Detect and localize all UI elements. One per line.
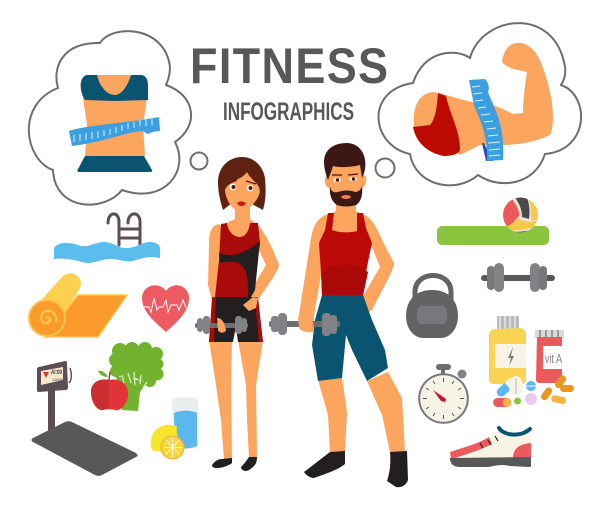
- shorts: [209, 297, 263, 342]
- icon: running shoe: [450, 428, 531, 467]
- red top: [413, 93, 460, 156]
- legs: [318, 378, 347, 452]
- icon: scale: [32, 361, 138, 476]
- thought bubble: muscular arm: [376, 23, 581, 185]
- icon: glass of water: [172, 397, 198, 450]
- shoes: [304, 451, 345, 478]
- icon: dumbbell: [481, 263, 555, 292]
- hair: [324, 143, 365, 180]
- measuring tape: [69, 117, 160, 146]
- icon: pills: [493, 374, 574, 407]
- neck and chest skin: [222, 205, 258, 242]
- slim torso: [83, 75, 147, 156]
- shoes: [212, 457, 257, 471]
- shorts: [312, 295, 388, 381]
- right arm: [243, 223, 279, 310]
- neck and chest skin: [326, 198, 366, 240]
- scale display: AI:00: [51, 370, 62, 376]
- icon: red vitamin bottle: [535, 330, 564, 383]
- icon: red vitamin bottle: vit A: [545, 351, 562, 366]
- scale display: [41, 367, 63, 385]
- eyes and lips: [228, 180, 256, 206]
- ears and face: [325, 165, 366, 207]
- eyes and mouth: [332, 174, 358, 199]
- icon: apple: [91, 371, 128, 410]
- measuring tape: [469, 79, 503, 161]
- tank top: [215, 223, 260, 297]
- icon: pool with ladder: [54, 214, 160, 263]
- icon: broccoli: [109, 342, 164, 411]
- hand on hip: [243, 297, 258, 311]
- thought bubble: slim waist: [29, 31, 207, 205]
- icon: yoga mat: [29, 273, 127, 337]
- title: FITNESS: [190, 39, 389, 95]
- icon: lemon: [151, 425, 184, 459]
- woman's dumbbell: [195, 316, 248, 334]
- bikini top: [81, 75, 148, 101]
- icon: volleyball on green bar: [437, 196, 549, 245]
- right arm: [354, 214, 394, 315]
- bikini bottom: [77, 156, 152, 172]
- flexed arm: [414, 43, 553, 155]
- man figure: [298, 143, 408, 487]
- left arm: [208, 224, 227, 330]
- hair: [218, 157, 266, 210]
- legs: [209, 340, 232, 459]
- beard: [330, 186, 362, 206]
- icon: stopwatch: [419, 364, 468, 423]
- icon: kettlebell: [406, 276, 458, 338]
- tank top: [319, 213, 372, 296]
- icon: heart with pulse: [142, 285, 189, 332]
- face: [225, 172, 260, 213]
- man's dumbbell: [269, 313, 340, 336]
- woman figure: [208, 157, 279, 471]
- subtitle: INFOGRAPHICS: [223, 98, 354, 126]
- icon: yellow supplement bottle: [489, 316, 526, 384]
- scale display: 140/30: [52, 378, 63, 382]
- left arm: [298, 214, 328, 332]
